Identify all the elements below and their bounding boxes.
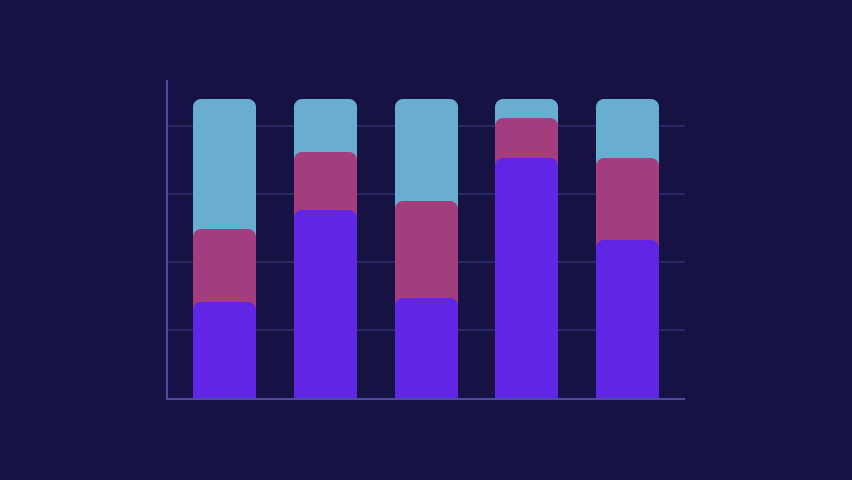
bar 2 — [294, 99, 357, 399]
bar 4 — [495, 99, 558, 399]
bar 5 — [596, 99, 659, 399]
bar 1 — [193, 99, 256, 399]
bar 3 — [395, 99, 458, 399]
axes — [166, 80, 685, 399]
